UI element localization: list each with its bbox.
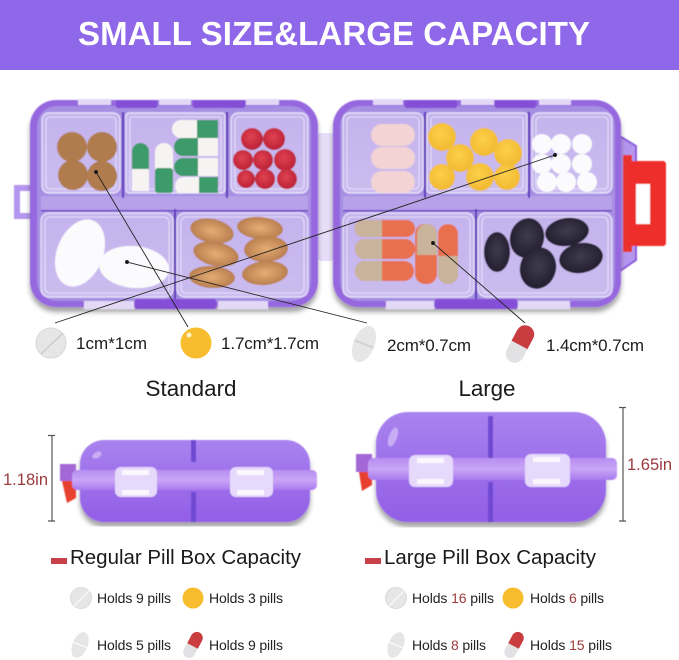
- heading: Regular Pill Box Capacity: [70, 546, 302, 569]
- closed box: standard: [60, 440, 317, 522]
- height bracket standard: [48, 436, 55, 521]
- label: Holds 16 pills: [412, 590, 494, 606]
- icon: gold ball: [180, 328, 212, 358]
- icon: round white tablet: [36, 328, 66, 358]
- pointer lines: [55, 154, 556, 327]
- amber softgels: [188, 215, 289, 289]
- heading: Large Pill Box Capacity: [384, 546, 597, 569]
- clip: [230, 467, 273, 497]
- compartments: [343, 113, 612, 297]
- yellow balls: [428, 123, 522, 191]
- label: Holds 6 pills: [530, 590, 604, 606]
- clip: [409, 455, 453, 487]
- icon: oval tablet: [384, 630, 408, 660]
- pink tablets: [371, 124, 415, 193]
- height bracket large: [619, 408, 626, 521]
- size label 1.4cm: 1.4cm*0.7cm: [546, 336, 644, 355]
- clip: [525, 454, 570, 487]
- label: Holds 5 pills: [97, 637, 171, 653]
- panel: open pill box, left half: [14, 99, 318, 309]
- icon: round tablet: [70, 588, 92, 608]
- icon: red capsule: [502, 630, 526, 660]
- icon: gold ball: [182, 588, 204, 608]
- label: Holds 8 pills: [412, 637, 486, 653]
- height label 1.65in: 1.65in: [627, 456, 672, 474]
- red latch: [623, 155, 666, 252]
- hinge between box halves: [316, 133, 335, 261]
- size legend: [36, 322, 644, 366]
- header banner: [0, 0, 679, 70]
- heading: Standard: Standard: [146, 376, 236, 401]
- label: Holds 3 pills: [209, 590, 283, 606]
- heading: Large: Large: [458, 376, 516, 401]
- orange speckled capsules: [354, 220, 458, 284]
- brown tablets: [57, 132, 117, 191]
- height label 1.18in: 1.18in: [3, 471, 48, 489]
- red balls: [233, 128, 297, 189]
- icon: oval tablet: [68, 630, 92, 660]
- marker: [365, 558, 381, 564]
- icon: red capsule: [181, 630, 205, 660]
- large white oval tablets: [46, 212, 171, 294]
- clip: [115, 467, 157, 497]
- panel: open pill box, right half: [333, 99, 666, 309]
- icon: oval tablet: [347, 322, 381, 366]
- title: SMALL SIZE&LARGE CAPACITY: [78, 15, 590, 52]
- label: Holds 15 pills: [530, 637, 612, 653]
- icon: red capsule: [503, 322, 537, 366]
- label: Holds 9 pills: [209, 637, 283, 653]
- marker: [51, 558, 67, 564]
- size label 2cm: 2cm*0.7cm: [387, 336, 471, 355]
- icon: round tablet: [386, 588, 406, 608]
- panel: large capacity: [365, 546, 612, 660]
- small white tablets: [532, 134, 597, 192]
- size label 1cm: 1cm*1cm: [76, 334, 147, 353]
- compartments: [41, 113, 308, 297]
- green and white capsules: [132, 120, 218, 195]
- panel: regular capacity: [51, 546, 302, 660]
- label: Holds 9 pills: [97, 590, 171, 606]
- black softgels: [484, 214, 605, 293]
- size label 1.7cm: 1.7cm*1.7cm: [221, 334, 319, 353]
- icon: gold ball: [502, 588, 524, 608]
- closed box: large: [356, 412, 617, 522]
